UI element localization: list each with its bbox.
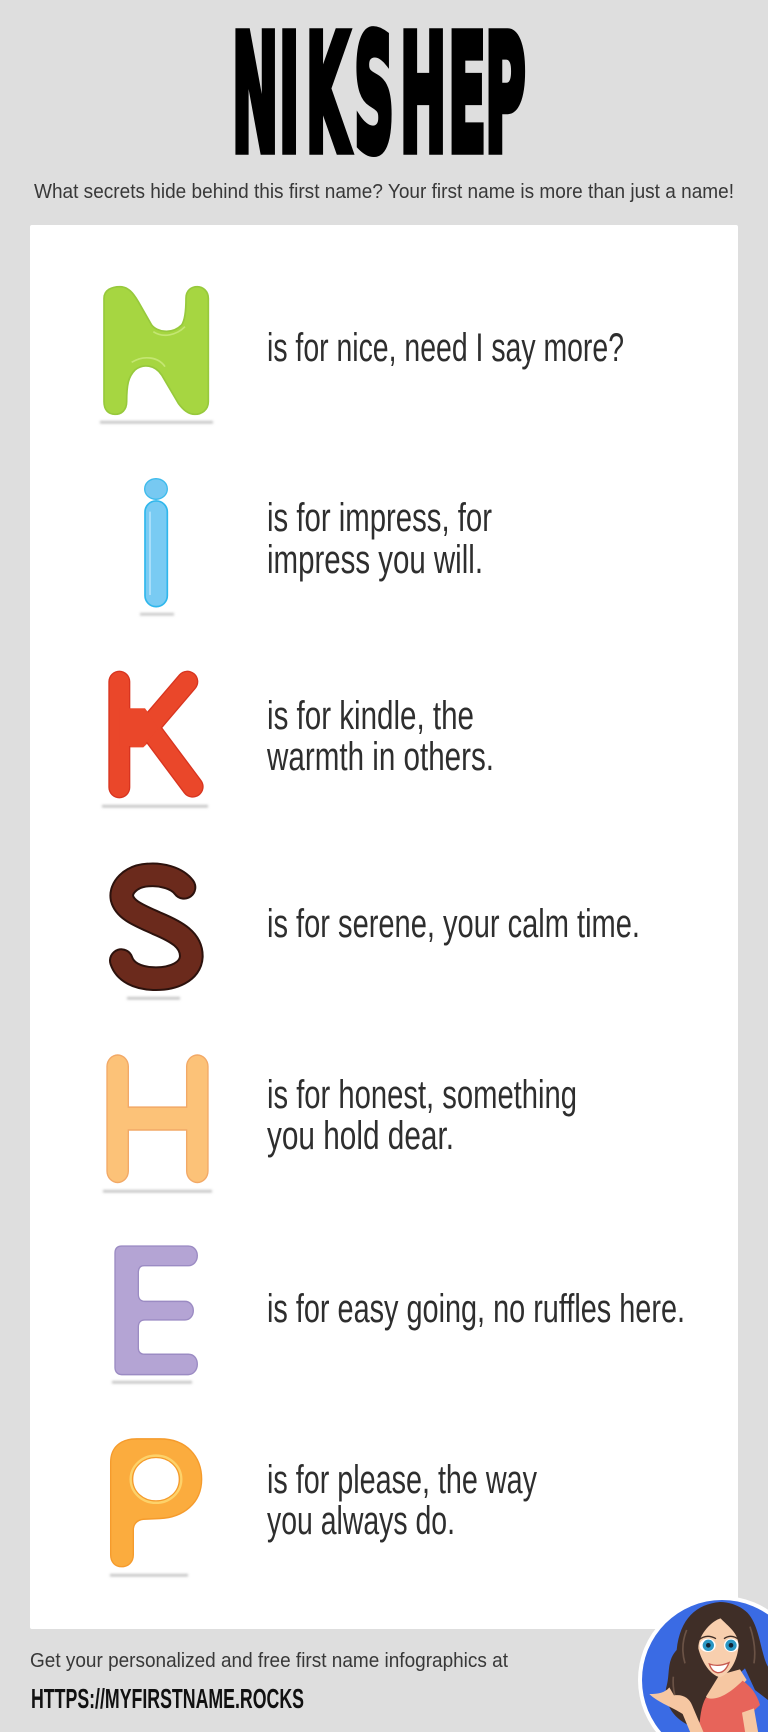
text: H lines (267, 1073, 577, 1158)
icon: letter P (110, 1439, 202, 1576)
icon: letter K (102, 682, 208, 808)
text: I lines: impress you will. (267, 538, 483, 582)
text: K lines (266, 694, 494, 779)
subtitle: What secrets hide behind this first name? Your first name is more than just a name! (34, 180, 734, 203)
text: I lines (267, 496, 492, 582)
text: S line: is for serene, your calm time. (267, 902, 640, 946)
footer url: HTTPS://MYFIRSTNAME.ROCKS (31, 1683, 304, 1714)
text: K lines: warmth in others. (266, 735, 494, 779)
row: P (110, 1439, 537, 1576)
title: NIKSHEP (232, 3, 526, 189)
row: H (103, 1066, 577, 1192)
text: P lines: you always do. (267, 1499, 455, 1543)
text: P lines: is for please, the way (267, 1458, 537, 1502)
avatar: woman in blue circle (638, 1596, 768, 1732)
row: S (121, 875, 640, 1000)
text: I lines: is for impress, for (267, 496, 492, 540)
icon: letter i (140, 479, 174, 616)
text: H lines: you hold dear. (267, 1114, 454, 1158)
icon: letter H (103, 1066, 212, 1192)
icon: letter E (112, 1246, 197, 1384)
row: E (112, 1246, 685, 1384)
text: H lines: is for honest, something (267, 1073, 577, 1117)
footer caption: Get your personalized and free first name infographics at (30, 1649, 508, 1672)
text: K lines: is for kindle, the (267, 694, 474, 738)
row: I (140, 479, 492, 616)
icon: letter N (100, 287, 213, 424)
icon: letter S (121, 875, 191, 1000)
text: N line: is for nice, need I say more? (267, 326, 624, 370)
text: P lines (267, 1458, 537, 1543)
panel: letters (30, 225, 738, 1629)
row: K (102, 682, 494, 808)
row: N (100, 287, 624, 424)
